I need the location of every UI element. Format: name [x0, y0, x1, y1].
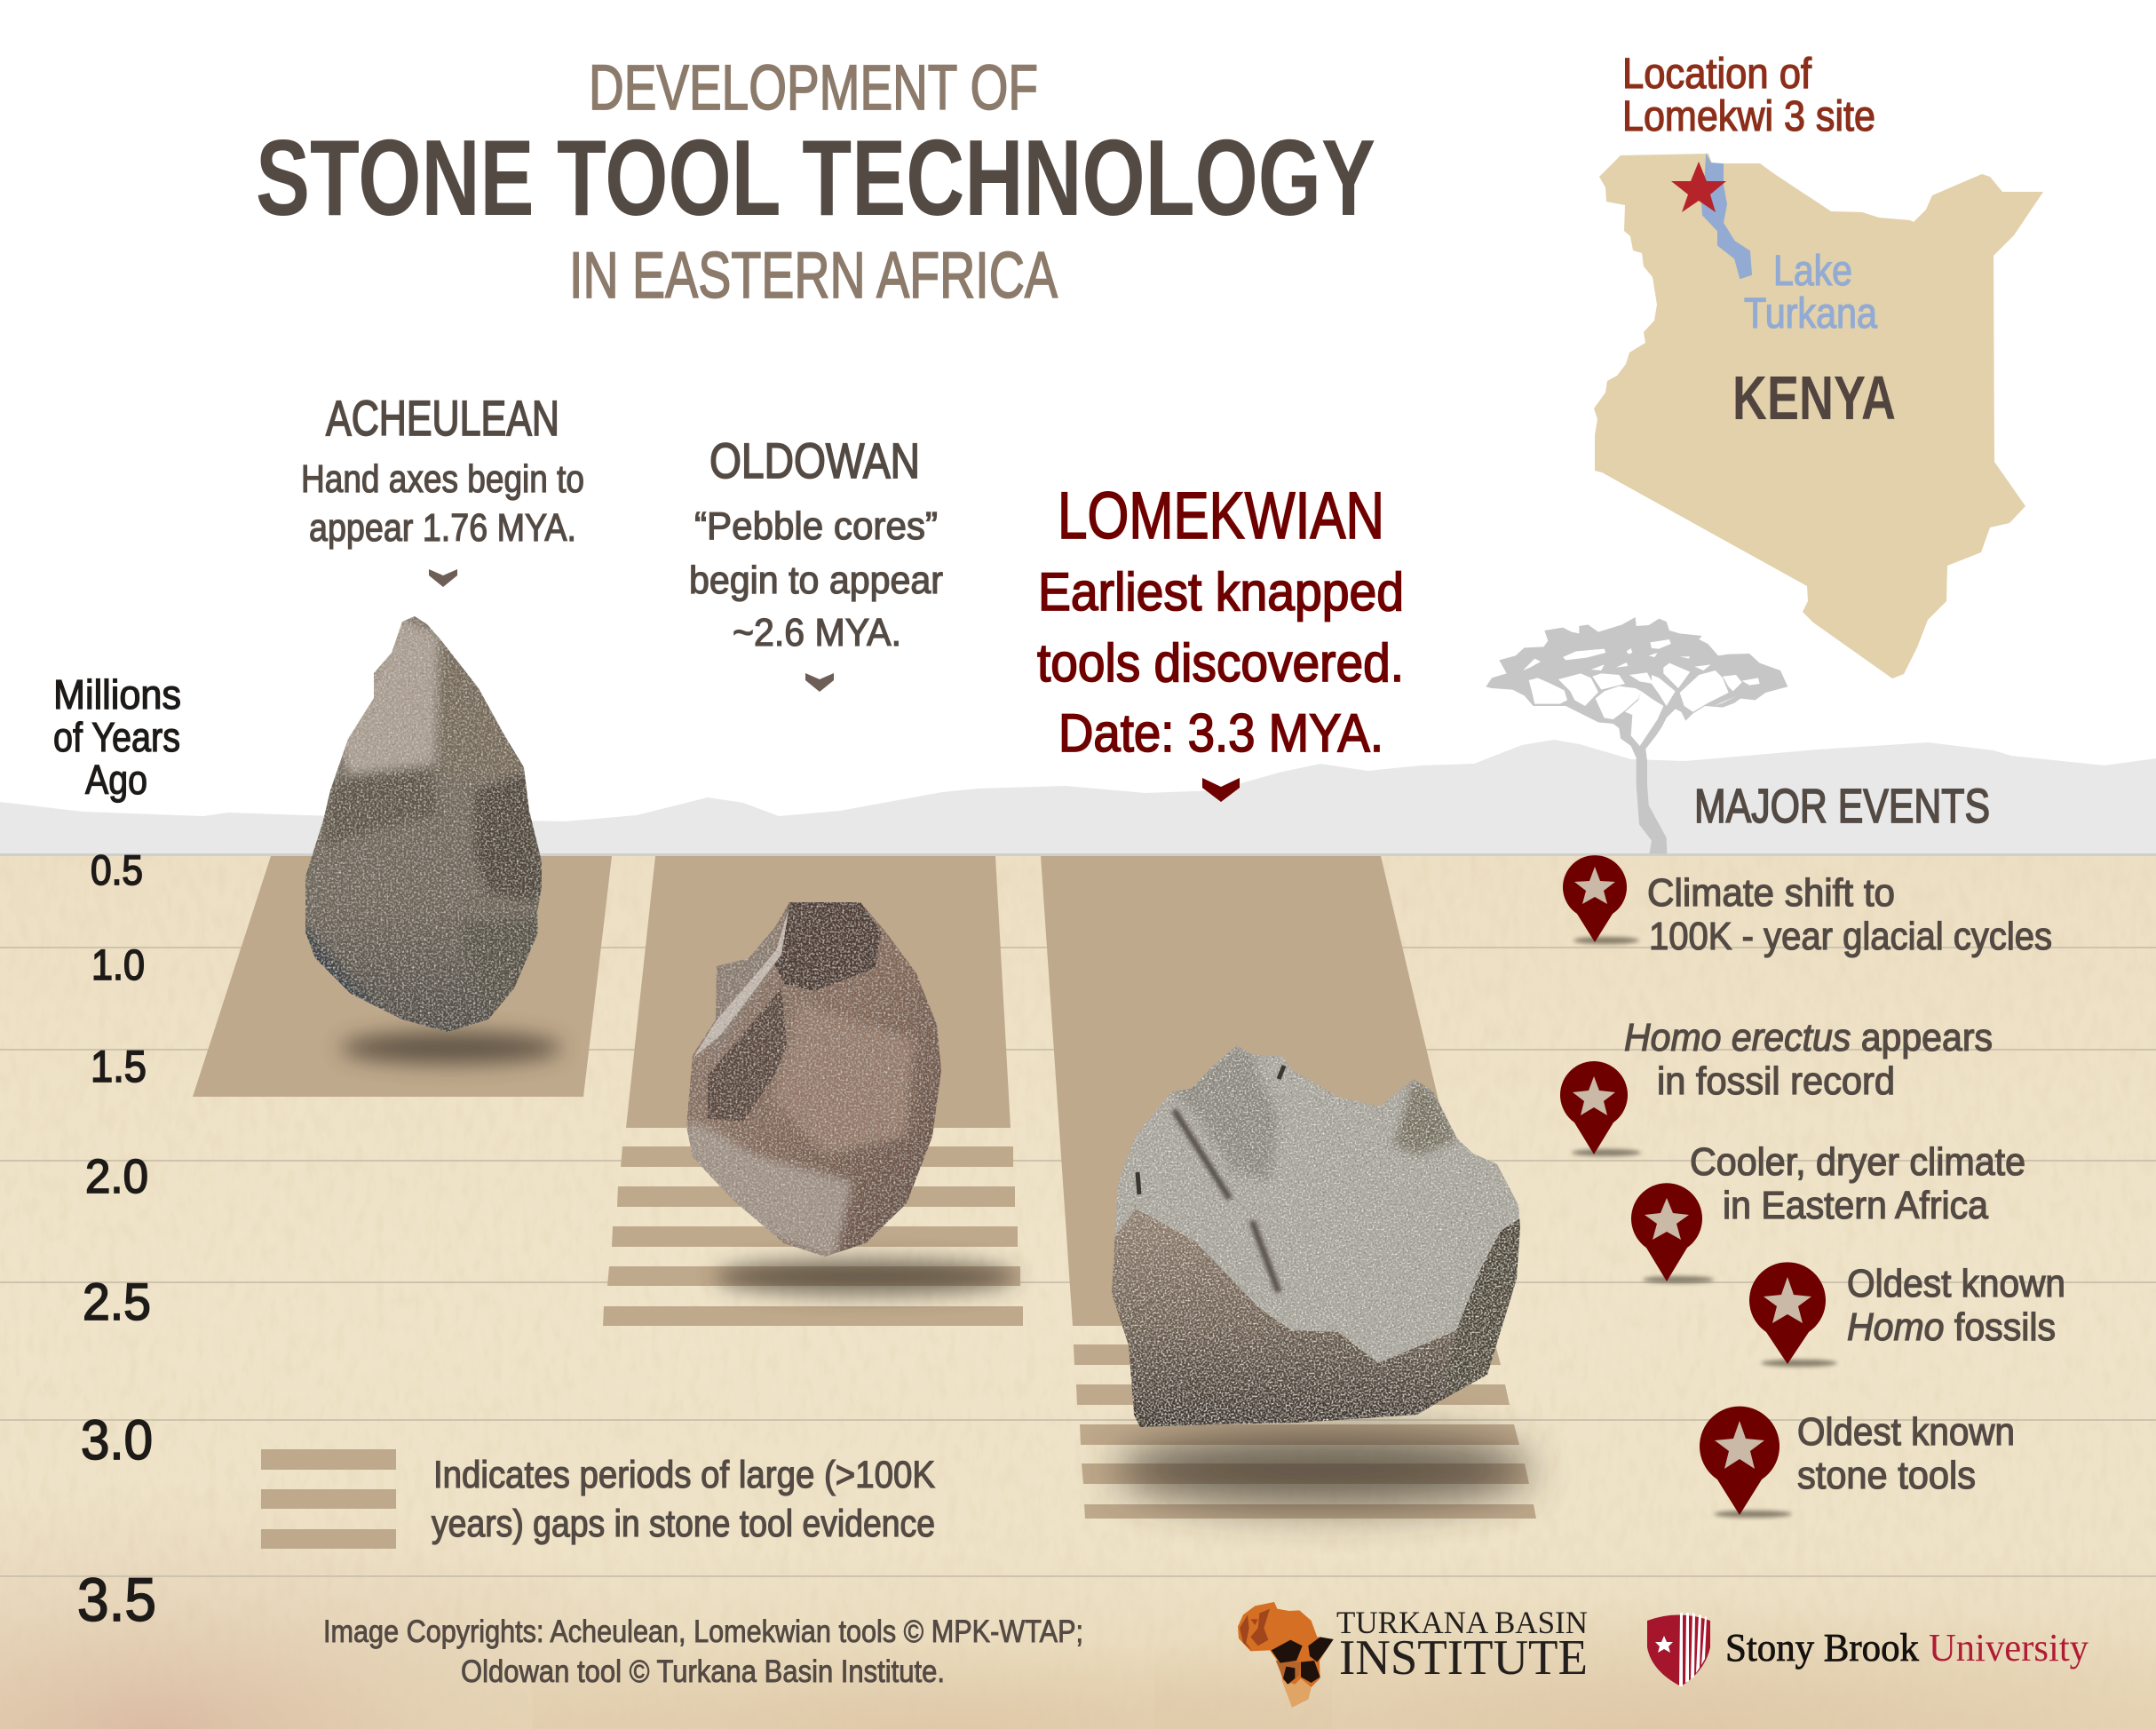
lomekwian rock — [1106, 1039, 1523, 1430]
lake label: Lake — [1773, 248, 1852, 295]
logo: stony brook university: University — [1929, 1626, 2089, 1670]
lake label: Turkana — [1744, 290, 1877, 337]
axis labels: 2.5 — [83, 1273, 151, 1331]
event 2 — [1560, 1016, 1993, 1156]
chevron: lomekwian — [1202, 778, 1240, 802]
event 1: 100K - year glacial cycles — [1649, 915, 2052, 958]
axis labels: 1.5 — [91, 1042, 147, 1091]
lake turkana — [1702, 156, 1751, 278]
lomekwian trapezoid and gap bars — [1041, 856, 1536, 1519]
axis title: Ago — [85, 757, 147, 803]
hills horizon — [0, 740, 2156, 855]
grid lines — [0, 948, 2156, 1576]
acacia tree — [1486, 617, 1787, 854]
shield icon — [1647, 1613, 1710, 1686]
site star — [1671, 162, 1726, 212]
map location label — [1622, 51, 1875, 140]
axis labels: 3.0 — [81, 1409, 153, 1471]
acheulean heading: ACHEULEAN — [326, 390, 559, 446]
logo: stony brook university — [1647, 1613, 2089, 1686]
major events heading: MAJOR EVENTS — [1694, 780, 1990, 833]
legend — [261, 1449, 935, 1549]
axis labels: 0.5 — [91, 846, 143, 893]
axis labels: 3.5 — [77, 1566, 156, 1634]
white gaps between branches — [1523, 639, 1760, 746]
dark right side — [1447, 1218, 1520, 1380]
logo: turkana basin institute: INSTITUTE — [1339, 1630, 1588, 1685]
title: IN EASTERN AFRICA — [569, 240, 1058, 312]
lomekwian heading: LOMEKWIAN — [1058, 479, 1384, 552]
canopy and trunk — [1486, 617, 1787, 854]
acheulean heading: appear 1.76 MYA. — [309, 506, 576, 550]
title: STONE TOOL TECHNOLOGY — [256, 117, 1375, 238]
lomekwian heading: tools discovered. — [1037, 633, 1404, 693]
axis title: Millions — [53, 671, 181, 718]
image copyrights: Image Copyrights: Acheulean, Lomekwian tools © MPK-WTAP; — [323, 1614, 1083, 1649]
image copyrights — [323, 1614, 1083, 1689]
axis labels — [77, 846, 156, 1634]
legend text: Indicates periods of large (>100K — [433, 1454, 935, 1496]
lomekwian heading: Date: 3.3 MYA. — [1058, 703, 1383, 763]
event 4: Homo fossils — [1847, 1305, 2056, 1349]
oldowan rock — [684, 897, 946, 1261]
event 5: stone tools — [1797, 1454, 1976, 1497]
event 3: Cooler, dryer climate — [1690, 1140, 2025, 1184]
axis labels: 1.0 — [91, 942, 145, 989]
country shape — [1594, 154, 2043, 678]
oldowan heading — [689, 432, 943, 654]
chevron: acheulean — [429, 569, 457, 587]
oldowan heading: “Pebble cores” — [694, 504, 938, 548]
logo: turkana basin institute: TURKANA BASIN — [1336, 1605, 1588, 1640]
event 5 — [1700, 1407, 2015, 1518]
map location label: Lomekwi 3 site — [1622, 93, 1875, 140]
map location label: Location of — [1622, 51, 1812, 98]
event 4: Oldest known — [1847, 1262, 2065, 1305]
event 5: Oldest known — [1797, 1410, 2015, 1454]
pin shadow — [1573, 937, 1639, 944]
title: DEVELOPMENT OF — [589, 53, 1038, 123]
acheulean rock — [302, 613, 551, 1039]
event 1 — [1563, 855, 2052, 958]
chevron: oldowan — [805, 673, 834, 692]
oldowan heading: OLDOWAN — [709, 432, 920, 488]
event 3: in Eastern Africa — [1723, 1184, 1988, 1227]
lomekwian heading — [1037, 479, 1404, 763]
event 2: Homo erectus appears — [1624, 1016, 1993, 1059]
kenya map — [1594, 154, 2043, 678]
axis labels: 2.0 — [85, 1150, 148, 1203]
oldowan heading: ~2.6 MYA. — [733, 611, 901, 654]
brown lower facet — [1106, 1209, 1523, 1430]
oldowan trapezoid and gap bars — [603, 856, 1023, 1326]
rock shadows — [340, 1032, 1532, 1507]
axis title: of Years — [53, 714, 180, 760]
logo: turkana basin institute — [1238, 1602, 1588, 1708]
event 2: in fossil record — [1657, 1059, 1895, 1103]
pin — [1563, 855, 1627, 942]
paper ground — [0, 855, 2156, 1729]
oldowan heading: begin to appear — [689, 559, 943, 602]
acheulean heading — [301, 390, 584, 550]
africa skull icon — [1238, 1602, 1334, 1708]
legend bars — [261, 1449, 396, 1549]
acheulean heading: Hand axes begin to — [301, 457, 584, 501]
lake label — [1744, 248, 1877, 337]
text: Climate shift to — [1647, 871, 1895, 915]
kenya label: KENYA — [1732, 363, 1896, 432]
logo: stony brook university: Stony Brook — [1725, 1626, 1919, 1670]
lomekwian heading: Earliest knapped — [1038, 562, 1404, 622]
axis title — [53, 671, 181, 803]
event 4 — [1749, 1262, 2065, 1367]
legend: years) gaps in stone tool evidence — [432, 1503, 935, 1545]
title — [256, 53, 1375, 312]
image copyrights: Oldowan tool © Turkana Basin Institute. — [461, 1654, 945, 1689]
event 3 — [1631, 1140, 2025, 1283]
acheulean trapezoid — [193, 856, 612, 1097]
